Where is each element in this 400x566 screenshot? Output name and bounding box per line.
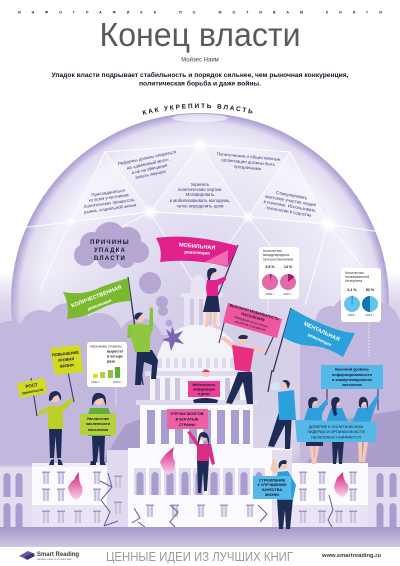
subtitle xyxy=(52,71,349,88)
block: parties: четко определить цели xyxy=(176,204,224,208)
chart card: travellers xyxy=(259,247,299,299)
chart card: travellers: 2010 г. xyxy=(283,292,293,296)
person: woman in yellow xyxy=(37,391,73,465)
sign: trust in leaders xyxy=(295,420,376,442)
person: man with megaphone xyxy=(268,370,296,449)
sign: population growth: численности xyxy=(86,422,111,426)
chart card: travellers: 1980 г. xyxy=(265,292,275,296)
cracks xyxy=(100,473,333,527)
person: man with sign, right xyxy=(253,459,296,529)
dome lattice xyxy=(20,145,380,305)
chart card: internet users: 2013 г. xyxy=(365,313,375,317)
sign: population growth: Увеличение xyxy=(87,417,109,421)
block: join processes: Присоединяться xyxy=(91,188,126,197)
block: parties: Укрепить xyxy=(191,182,210,187)
banner: high mobility: ВЫСОКАЯ МОБИЛЬНОСТЬ xyxy=(229,303,280,321)
chart card: travellers: Количество xyxy=(263,249,282,253)
chart card: internet users: 53 % xyxy=(366,288,375,292)
chart card: population: в четыре xyxy=(107,354,123,358)
block: participation xyxy=(262,188,319,219)
block: transparency: организации должны быть xyxy=(221,157,276,167)
flag: mental revolution: революция xyxy=(307,332,333,347)
block: join processes: ко всем участникам xyxy=(88,192,129,203)
cloud: causes of decline: ПРИЧИНЫ xyxy=(90,240,130,246)
block: transparency xyxy=(216,151,281,173)
capitol back lantern xyxy=(181,275,223,326)
chart card: travellers: международных xyxy=(263,253,290,257)
sign: brain drain: В БОГАТЫЕ xyxy=(175,416,199,422)
block: join processes: политических процессов, xyxy=(84,197,135,209)
sign: high information level xyxy=(321,365,383,410)
title: Конец власти xyxy=(100,16,300,53)
sign: better life: ЖИЗНИ xyxy=(264,493,279,497)
cloud: causes of decline: ВЛАСТИ xyxy=(94,256,126,262)
person: woman with brain drain sign xyxy=(167,409,215,493)
chart card: population: Население планеты xyxy=(90,344,122,348)
central lower tier xyxy=(128,448,292,527)
flag: quantitative revolution: КОЛИЧЕСТВЕННАЯ xyxy=(71,285,123,309)
chart card: internet users xyxy=(341,268,381,322)
flag: mobile revolution xyxy=(156,237,238,295)
block: participation: Стимулировать xyxy=(276,190,308,200)
sign: population growth: населения xyxy=(88,428,108,432)
sign: brain drain: УТЕЧКА МОЗГОВ xyxy=(170,411,204,416)
sign: higher living standard: УРОВНЯ xyxy=(58,356,75,363)
person: seated with sign xyxy=(188,369,220,403)
chart card: travellers: путешественников xyxy=(263,258,293,262)
sign: high information level: и коммуникационное xyxy=(332,378,372,382)
block: transparency: Политические и общественные xyxy=(216,151,281,162)
dome triangles xyxy=(70,145,328,224)
chart card: population xyxy=(87,342,127,387)
person: woman with mobile flag xyxy=(203,268,226,330)
cloud: causes of decline: УПАДКА xyxy=(94,248,126,254)
sign: trust in leaders: ДОВЕРИЕ К ПОЛИТИЧЕСКИМ xyxy=(309,425,363,429)
flag: mental revolution: МЕНТАЛЬНАЯ xyxy=(302,321,340,343)
block: participation: в политике. Использовать xyxy=(263,199,317,213)
heading: how to strengthen power: КАК УКРЕПИТЬ ВЛАСТЬ xyxy=(142,104,252,115)
chart card: internet users: Интернета xyxy=(345,279,362,283)
block: reforms: Реформы должны опираться xyxy=(118,149,177,166)
footer xyxy=(0,547,400,566)
left wing xyxy=(32,450,131,527)
sign: better life xyxy=(253,476,291,499)
block: reforms: власть имущих xyxy=(135,169,167,180)
subtitle: политическая борьба и даже войны. xyxy=(139,80,261,88)
chart card: travellers: 3,5 % xyxy=(265,265,275,269)
person: green man xyxy=(127,304,158,385)
sign: high information level: население xyxy=(342,383,362,387)
sign: better life: КАЧЕСТВА xyxy=(262,488,282,492)
block: reforms: на «движимый мозг», xyxy=(126,157,170,171)
chart card: internet users: пользователей xyxy=(345,275,369,279)
star burst xyxy=(162,326,184,351)
flag: quantitative revolution: революция xyxy=(87,298,113,311)
website: www.smartreading.ru xyxy=(321,553,381,559)
flag: mental revolution xyxy=(273,308,355,372)
glass dome xyxy=(0,113,400,532)
background clouds xyxy=(0,297,400,470)
subtitle: Упадок власти подрывает стабильность и порядок сильнее, чем рыночная конкуренция, xyxy=(52,71,349,79)
sign: information mobility xyxy=(188,381,220,397)
author: Мойзес Наим xyxy=(181,56,219,64)
header label: ИНФОГРАФИКА ПО МОТИВАМ КНИГИ xyxy=(18,10,382,14)
sign: literacy growth xyxy=(17,378,47,416)
block: transparency: прозрачными xyxy=(234,164,262,171)
block: parties: Мотивировать xyxy=(185,192,215,197)
slogan: ЦЕННЫЕ ИДЕИ ИЗ ЛУЧШИХ КНИГ xyxy=(106,549,293,564)
block: participation: массовое участие людей xyxy=(265,194,317,208)
sign: literacy growth: грамотности xyxy=(21,388,44,395)
chart card: population: вырастет xyxy=(107,350,124,354)
dome text blocks xyxy=(82,149,319,219)
cloud: causes of decline xyxy=(74,222,172,326)
flag: mobile revolution: революция xyxy=(184,249,210,256)
logo: Ценные идеи из лучших книг xyxy=(37,557,72,561)
block: parties: политические партии. xyxy=(178,187,222,192)
block: reforms: а не на обещания xyxy=(131,163,168,175)
capitol dome xyxy=(145,325,253,400)
chart card: population: 1982 г. xyxy=(91,380,100,384)
banner: high mobility: НАСЕЛЕНИЯ xyxy=(241,312,265,322)
right wing xyxy=(272,450,368,527)
block: join processes: рынка, социальной жизни xyxy=(84,202,137,215)
chart card: population: 2023 г. xyxy=(113,380,122,384)
ground band xyxy=(0,527,400,547)
block: reforms xyxy=(118,149,181,183)
banner: high mobility: регионов в развитые xyxy=(234,319,266,332)
sign: higher living standard: ЖИЗНИ xyxy=(58,362,74,369)
banner: high mobility: Миграция из отсталых xyxy=(234,315,269,329)
person: woman in green xyxy=(80,393,116,465)
sign: trust in leaders: НЕУКЛОННО СНИЖАЕТСЯ xyxy=(311,436,361,440)
far wings xyxy=(0,467,400,527)
sign: better life: К УЛУЧШЕНИЮ xyxy=(257,483,287,487)
chart card: population: раза xyxy=(107,360,115,364)
group: three women xyxy=(295,395,379,464)
logo: Smart Reading xyxy=(37,551,79,558)
person: man in pink xyxy=(220,335,266,404)
sign: high information level: Высокий уровень xyxy=(335,368,370,372)
sign: higher living standard xyxy=(50,345,83,402)
chart card: internet users: Количество xyxy=(345,271,364,275)
sign: information mobility: и денег xyxy=(198,392,211,396)
sign: information mobility: Мобильность xyxy=(192,383,216,387)
sign: brain drain: СТРАНЫ xyxy=(179,422,196,427)
sign: information mobility: информации xyxy=(193,388,215,392)
logo xyxy=(19,551,79,561)
block: join processes xyxy=(82,186,137,215)
flames xyxy=(68,447,348,500)
block: parties: и мобилизовывать молодежь, xyxy=(170,198,230,203)
block: parties xyxy=(170,182,230,208)
sign: higher living standard: ПОВЫШЕНИЕ xyxy=(52,350,79,357)
sign: literacy growth: РОСТ xyxy=(25,382,38,389)
sign: high information level: информированности xyxy=(332,373,373,377)
chart card: internet users: 1993 г. xyxy=(347,313,357,317)
banner: high mobility xyxy=(219,303,282,355)
chart card: internet users: 0,1 % xyxy=(347,288,357,292)
sign: population growth xyxy=(80,414,116,435)
block: participation: технологии в соцсетях xyxy=(266,205,312,218)
sign: better life: СТРЕМЛЕНИЕ xyxy=(259,478,286,482)
capitol tier two xyxy=(136,400,258,448)
sign: brain drain xyxy=(167,409,208,429)
chart card: travellers: 14 % xyxy=(284,265,293,269)
sign: trust in leaders: ЛИДЕРАМ И ОРГАНАМ ВЛАСТИ xyxy=(307,430,365,434)
flag: mobile revolution: МОБИЛЬНАЯ xyxy=(179,242,216,252)
flag: quantitative revolution xyxy=(63,277,143,385)
